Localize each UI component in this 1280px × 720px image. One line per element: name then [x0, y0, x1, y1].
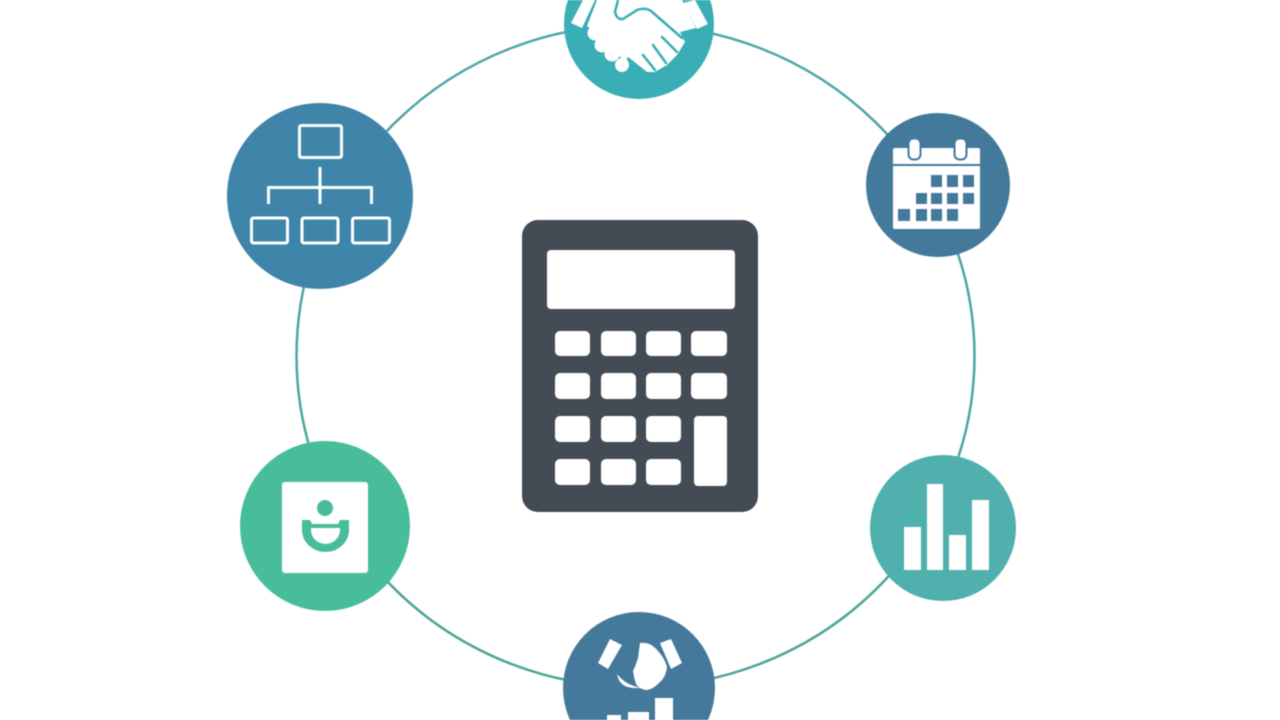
headset crescent: [617, 674, 640, 688]
top box: [300, 126, 342, 158]
icon: support agent with growth bars: [563, 612, 715, 720]
calendar rings: [908, 138, 920, 160]
connectors: [268, 167, 372, 204]
clasped hands: [587, 0, 696, 72]
icon: organisation chart: [227, 103, 413, 289]
diagram: calculator surrounded by service icons: [226, 0, 1017, 720]
calculator keys: [555, 331, 727, 486]
face smile: [302, 520, 349, 552]
calculator screen: [547, 250, 735, 309]
icon: bar chart: [870, 455, 1016, 601]
icon: handshake: [564, 0, 714, 99]
right cuff: [683, 0, 708, 29]
left cuff: [571, 0, 595, 28]
lower boxes: [252, 218, 288, 243]
thumb and finger outlines: [615, 0, 682, 70]
left tilted card: [598, 639, 622, 669]
icon: calendar: [866, 113, 1010, 257]
calendar days: [898, 175, 974, 221]
right tilted card: [660, 639, 682, 669]
calendar page: [893, 148, 980, 229]
growth bars: [607, 715, 621, 720]
head: [633, 643, 667, 690]
icon: calculator: [522, 220, 758, 512]
face eye: [317, 500, 333, 516]
icon: smiling face card: [240, 441, 410, 611]
connecting ring: [296, 25, 974, 687]
